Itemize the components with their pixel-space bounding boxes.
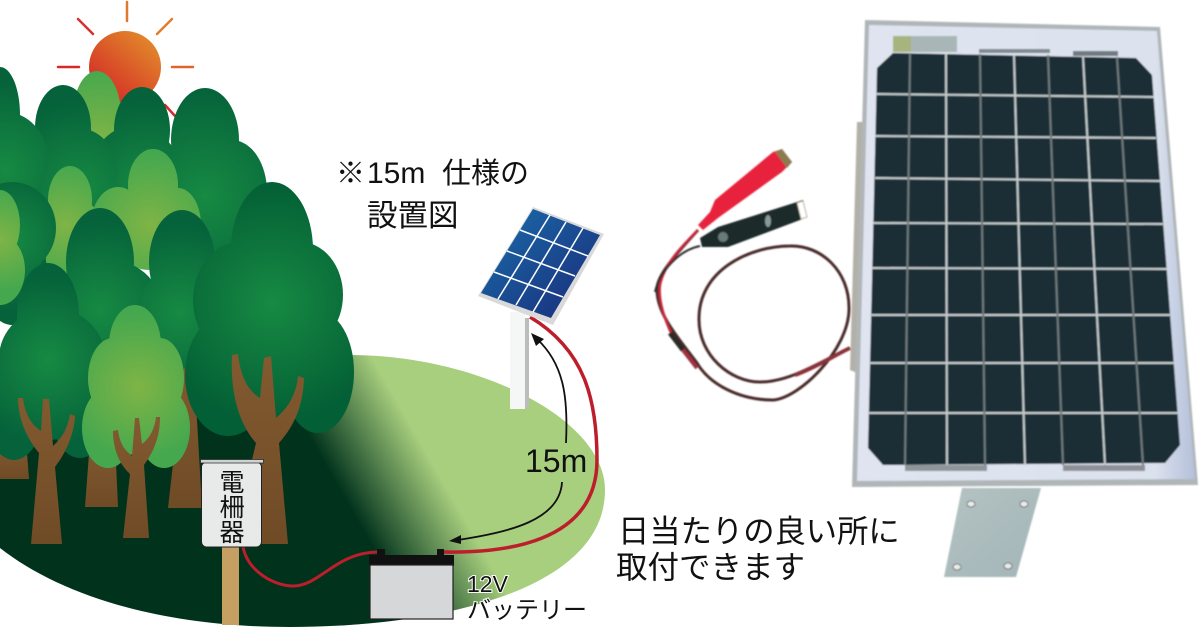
sign: electric fence energizer: 器 (219, 519, 245, 547)
tree: light left (45, 166, 106, 295)
pole: solar panel pole (510, 312, 529, 409)
tree: front left trunk (18, 398, 75, 544)
icon: battery (369, 549, 454, 619)
heading: 15m spec layout note (336, 157, 529, 233)
panel: bottom fixings (905, 465, 1145, 471)
forest (0, 67, 354, 544)
icon: sun (58, 2, 193, 116)
tree: front right trunk (232, 354, 304, 544)
heading: 15m spec layout note: ※ (336, 158, 365, 190)
sign: electric fence energizer (200, 460, 264, 547)
sign: electric fence energizer: 電 (219, 469, 245, 497)
tree: light far left (0, 190, 25, 305)
panel: inner frame (857, 25, 1195, 481)
back tree trunks (0, 355, 202, 508)
tree: dark left (0, 182, 56, 325)
tree: far left (0, 67, 47, 204)
panel: label sticker (893, 36, 1118, 56)
wire: battery to solar panel (444, 317, 597, 552)
icon: small solar panel (478, 207, 604, 325)
post: sign post (222, 547, 239, 625)
heading: 15m spec layout note: 仕様の (442, 157, 529, 190)
sign: electric fence energizer: 柵 (219, 494, 245, 522)
tree: light front trunk (113, 417, 160, 538)
clip: black (700, 200, 807, 247)
tree: front right crown (185, 182, 354, 436)
arrow: distance down to battery (449, 482, 562, 544)
panel: grid lines (868, 54, 1178, 465)
panel: dark cells (868, 53, 1180, 465)
tree: light front crown (82, 305, 190, 468)
label: 15m: 15m (525, 443, 587, 479)
clip: red (698, 149, 792, 230)
ground hill (0, 355, 605, 627)
tree: back centre (85, 87, 185, 255)
text: installation note: 取付できます (616, 549, 805, 585)
heading: 15m spec layout note: 15m (367, 157, 425, 190)
tree: dark mid right (135, 210, 235, 370)
arrow: distance up to panel (531, 333, 566, 443)
bracket: rear strip (850, 122, 866, 375)
tree: dark mid left (40, 208, 164, 390)
label: 12V battery: 12V (467, 571, 509, 597)
tree: front left crown (0, 263, 110, 460)
tree: back left (15, 85, 117, 270)
photo: solar panel and cable (655, 20, 1198, 577)
label: 12V battery: バッテリー (467, 597, 587, 624)
text: installation note (616, 514, 900, 585)
wire: fence energizer to battery (243, 547, 377, 586)
panel: frame (852, 20, 1198, 487)
tree: light centre (91, 149, 201, 270)
heading: 15m spec layout note: 設置図 (367, 199, 458, 233)
text: installation note: 日当たりの良い所に (618, 514, 900, 549)
bracket: mounting plate (944, 488, 1041, 577)
label: 12V battery (467, 571, 587, 624)
wire: cable loop (655, 230, 850, 400)
tree: light back (73, 71, 121, 159)
tree: large back right (145, 88, 267, 345)
